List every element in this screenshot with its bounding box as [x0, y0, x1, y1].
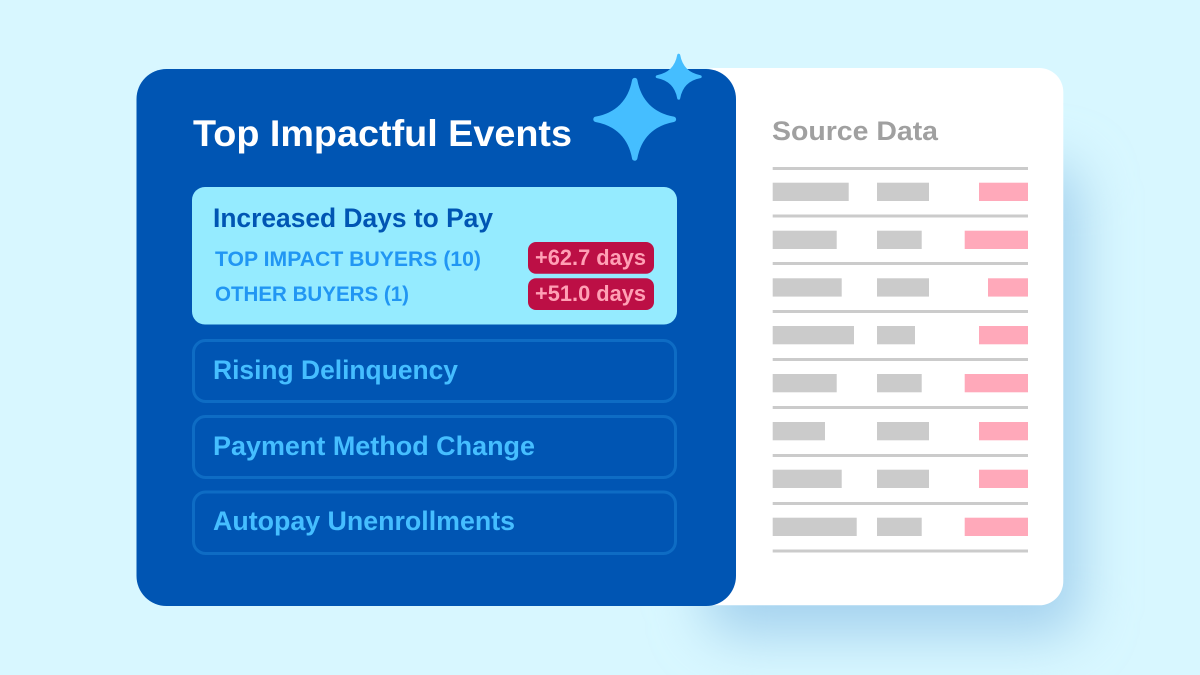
card: autopay unenrollments: Autopay Unenrollments [213, 506, 515, 536]
card heading: Increased Days to Pay [213, 203, 493, 233]
card: rising delinquency [194, 340, 676, 402]
card: rising delinquency: Rising Delinquency [213, 355, 458, 385]
card: autopay unenrollments [194, 492, 676, 554]
badge: +51.0 days: +51.0 days [535, 281, 646, 306]
card shadow [705, 165, 1080, 635]
row label: top impact buyers: TOP IMPACT BUYERS (10) [215, 247, 481, 271]
panel: source data [690, 68, 1063, 605]
table [773, 167, 1028, 552]
panel: top impactful events [136, 69, 736, 606]
icon: small sparkle [657, 55, 700, 98]
badge: +62.7 days: +62.7 days [535, 245, 646, 270]
card: payment method change [194, 416, 676, 478]
heading: source data: Source Data [772, 116, 939, 146]
card: payment method change: Payment Method Change [213, 431, 535, 461]
icon: large sparkle [596, 81, 673, 158]
title: Top Impactful Events [193, 113, 572, 154]
card: increased days to pay [192, 187, 677, 324]
row label: other buyers: OTHER BUYERS (1) [215, 282, 409, 306]
